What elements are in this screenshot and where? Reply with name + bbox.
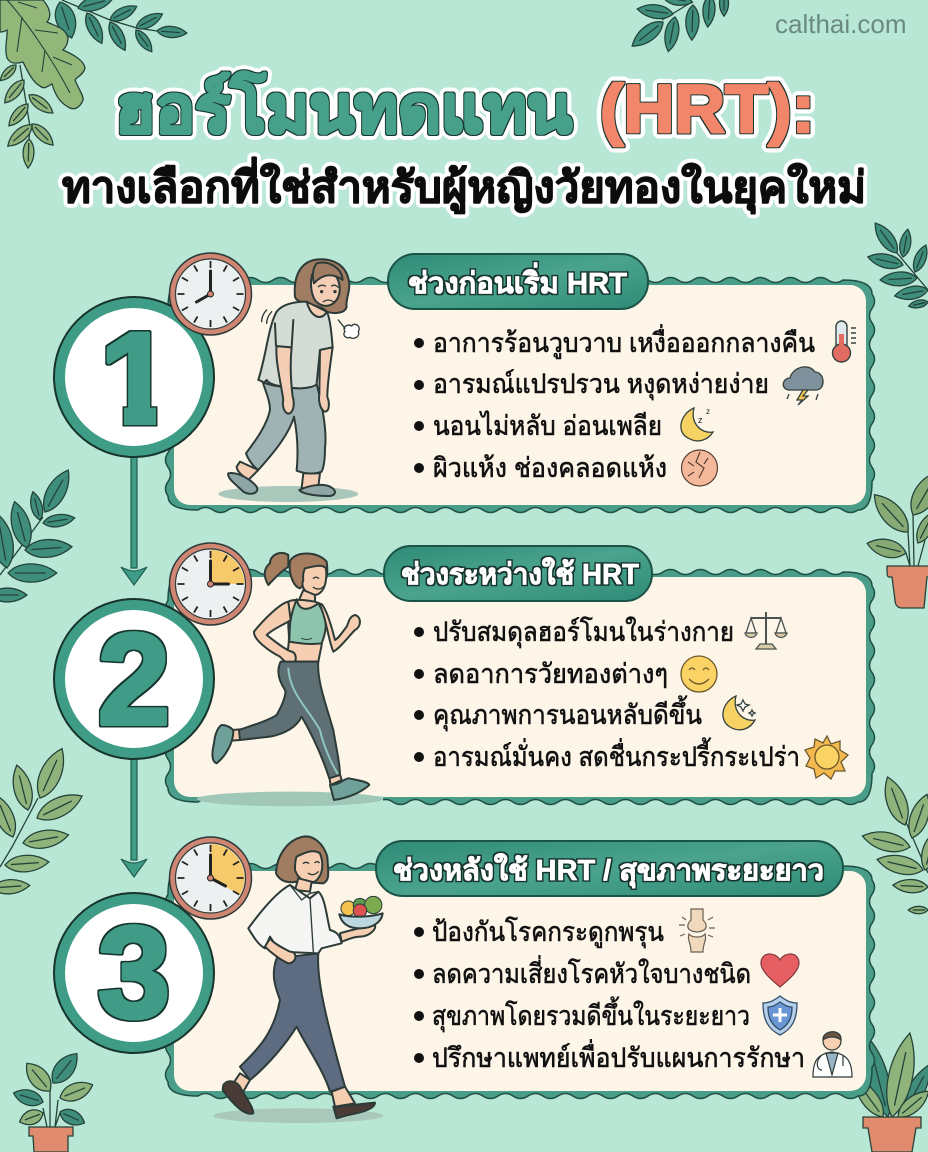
icon: cracked skin [682,450,718,486]
title white outline: (HRT): [600,71,815,147]
panel 1 bullets: ผิวแห้ง ช่องคลอดแห้ง [433,453,667,483]
panel 3 heading pill [376,841,843,896]
decoration: top-center teal branch [628,0,729,53]
icon: knee joint [679,909,715,952]
icon: crescent moon: z [706,407,710,416]
icon: balance scale [745,612,787,649]
panel 2 wavy card [166,570,874,808]
panel 1 bullets: นอนไม่หลับ อ่อนเพลีย [433,411,662,441]
panel 2: during HRT [166,546,874,808]
panel 3 wavy card [166,864,874,1098]
panel 3: after HRT [166,836,874,1123]
icon: heart [761,954,799,987]
icon: moon with stars [723,696,755,730]
decoration: bottom-left potted plant [11,1048,96,1152]
watermark: calthai.com [775,9,906,39]
panel 1 heading pill [388,254,648,309]
panel 3 heading pill: ช่วงหลังใช้ HRT / สุขภาพระยะยาว [393,853,824,888]
step number 2 [54,599,214,759]
arrow: step 1 to 2 [121,455,147,585]
arrow: step 2 to 3 [121,758,147,877]
panel 1: before HRT [166,254,874,512]
title line 2: ทางเลือกที่ใช่สำหรับผู้หญิงวัยทองในยุคใหม่ [62,157,866,215]
panel 1 bullets: อารมณ์แปรปรวน หงุดหง่ายง่าย [433,368,769,401]
panel 1 bullets [414,324,815,483]
decoration: right lower olive sprig [860,774,928,914]
illustration: woman with salad bowl [213,836,383,1123]
panel 3 bullets: ลดความเสี่ยงโรคหัวใจบางชนิด [432,955,751,989]
panel 2 heading pill: ช่วงระหว่างใช้ HRT [401,557,639,591]
step number 1: 1 [100,305,172,451]
decoration: bottom-right potted plant [848,1031,928,1152]
title white outline [62,70,866,215]
decoration: right upper leaves [866,219,928,310]
panel 2 bullets [414,616,800,772]
step number 1 [54,297,214,457]
panel 2 bullets: ลดอาการวัยทองต่างๆ [433,659,668,689]
panel 3 bullets [414,917,805,1073]
title HRT accent: (HRT): [600,71,815,147]
icon: doctor [813,1032,852,1077]
icon: storm cloud [783,367,823,405]
panel 2 bullets: อารมณ์มั่นคง สดชื่นกระปรี้กระเปร่า [433,737,800,772]
panel 1 heading pill: ช่วงก่อนเริ่ม HRT [408,262,627,300]
panel 3 bullets: ป้องกันโรคกระดูกพรุน [432,917,664,949]
panel 3 bullets: สุขภาพโดยรวมดีขึ้นในระยะยาว [432,996,750,1033]
clock 1: no elapsed time [170,253,252,335]
title white outline: ทางเลือกที่ใช่สำหรับผู้หญิงวัยทองในยุคใหม่ [62,157,866,215]
icon: sun [805,736,848,779]
panel 2 bullets: คุณภาพการนอนหลับดีขึ้น [433,695,702,732]
step number 3 [54,893,214,1053]
decoration: top-left teal branch [51,0,187,55]
icon: crescent moon: z [698,415,703,425]
icon: smiley [681,656,717,692]
title white outline: ฮอร์โมนทดแทน [115,70,572,146]
illustration: running woman [197,553,383,806]
step number 3: 3 [98,899,170,1045]
decoration: top-left olive sprig [0,62,57,168]
icon: crescent moon [681,407,713,441]
title line 1: ฮอร์โมนทดแทน [115,70,572,146]
icon: shield [763,996,797,1035]
title [62,70,866,215]
decoration: right middle potted plant [865,466,928,608]
panel 1 bullets: อาการร้อนวูบวาบ เหงื่อออกกลางคืน [433,324,815,359]
illustration: tired woman [218,259,359,502]
panel 3 bullets: ปรึกษาแพทย์เพื่อปรับแผนการรักษา [432,1039,805,1073]
clock 3: third elapsed [170,837,252,919]
icon: thermometer [832,321,856,362]
panel 1 wavy card [166,278,874,512]
decoration: top-left oak leaf [0,0,85,109]
decoration: left middle leaves [0,466,76,602]
clock 2: quarter elapsed [170,543,252,625]
panel 2 heading pill [384,546,652,601]
step number 2: 2 [98,606,170,752]
panel 2 bullets: ปรับสมดุลฮอร์โมนในร่างกาย [433,616,734,649]
decoration: left lower olive sprig [0,744,86,895]
